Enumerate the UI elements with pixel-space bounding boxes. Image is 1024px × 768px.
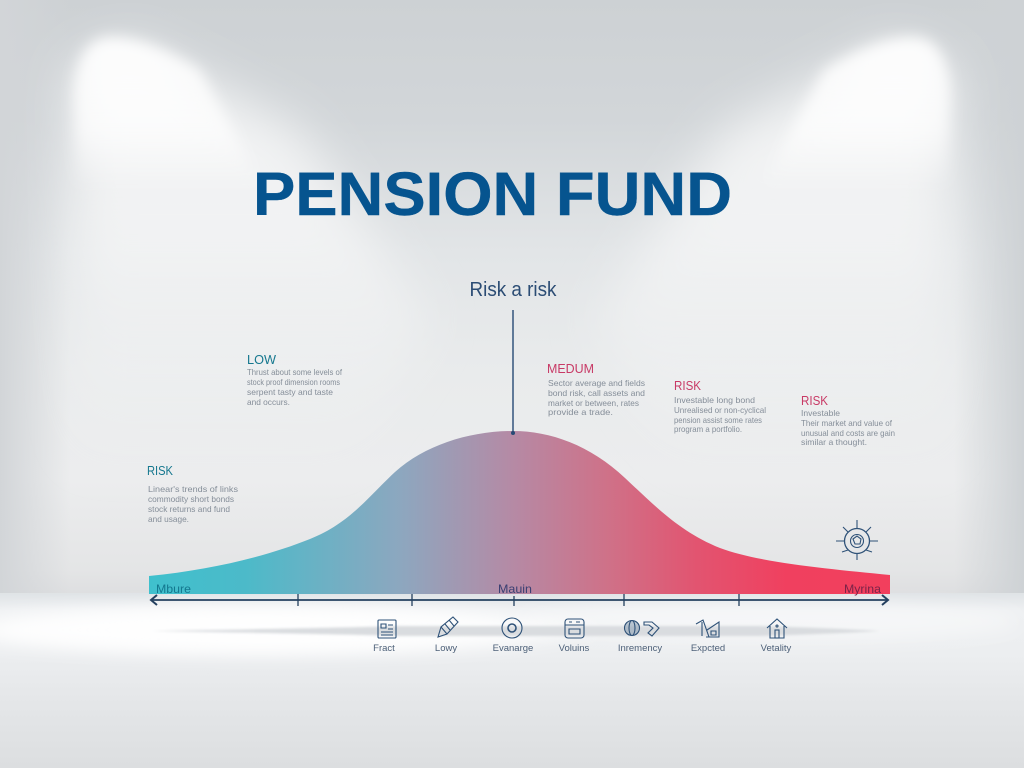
text block: risk right: Investable [801, 408, 840, 418]
text block: risk right: Their market and value of [801, 418, 893, 428]
subtitle: Risk a risk [470, 279, 557, 301]
text block: medium: MEDUM [547, 362, 594, 376]
icon: target circle [502, 618, 522, 638]
text block: medium [547, 362, 645, 417]
text block: low: Thrust about some levels of [247, 367, 343, 377]
spotlight: right [594, 37, 952, 470]
label: inherency: Inremency [618, 643, 662, 654]
background wall [0, 0, 1024, 594]
icon: calculator [565, 619, 584, 638]
label: average: Evanarge [493, 643, 533, 654]
icon: chart building [696, 620, 719, 637]
text block: low [247, 353, 343, 407]
label: fact: Fract [373, 643, 395, 654]
label: volume: Voluins [559, 643, 590, 654]
axis arrow [151, 594, 888, 606]
text block: risk center right: Unrealised or non-cyclical [674, 405, 766, 415]
label: volatility: Vetality [761, 643, 792, 654]
text block: risk right: unusual and costs are gain [801, 428, 895, 438]
text block: low: LOW [247, 353, 276, 367]
label: expected: Expcted [691, 643, 725, 654]
axis labels on curve [156, 582, 881, 596]
text block: risk center right [674, 379, 766, 434]
text block: low: and occurs. [247, 397, 290, 407]
axis labels on curve: Myrina [844, 582, 881, 596]
text block: medium: market or between, rates [548, 398, 639, 408]
text block: risk left [147, 464, 238, 524]
text block: risk center right: pension assist some rates [674, 415, 762, 425]
text block: medium: provide a trade. [548, 407, 613, 417]
icon: pencil [438, 617, 458, 637]
text block: medium: Sector average and fields [548, 378, 645, 388]
axis labels on curve: Mbure [156, 582, 191, 596]
text block: risk center right: Investable long bond [674, 395, 755, 405]
icon: globe and tag [624, 620, 659, 636]
title: PENSION FUND [253, 160, 732, 228]
floor [0, 593, 1024, 768]
bell curve chart [149, 431, 890, 594]
text block: risk center right: program a portfolio. [674, 424, 742, 434]
text block: risk left: Linear's trends of links [148, 484, 238, 494]
spotlight: left [72, 37, 430, 470]
text block: risk right: similar a thought. [801, 437, 867, 447]
axis labels on curve: Mauin [498, 582, 532, 596]
text block: risk left: stock returns and fund [148, 504, 230, 514]
text block: risk right [801, 394, 895, 447]
text block: risk center right: RISK [674, 379, 702, 393]
icon: fact document [378, 620, 396, 638]
text block: risk left: RISK [147, 464, 174, 478]
pointer line [511, 310, 515, 435]
text block: risk left: and usage. [148, 514, 189, 524]
icon: house [767, 619, 787, 638]
text block: risk right: RISK [801, 394, 829, 408]
label: low: Lowy [435, 643, 457, 654]
text block: risk left: commodity short bonds [148, 494, 234, 504]
text block: low: stock proof dimension rooms [247, 377, 340, 387]
icon: ship wheel [836, 520, 878, 560]
text block: low: serpent tasty and taste [247, 387, 333, 397]
text block: medium: bond risk, call assets and [548, 388, 645, 398]
